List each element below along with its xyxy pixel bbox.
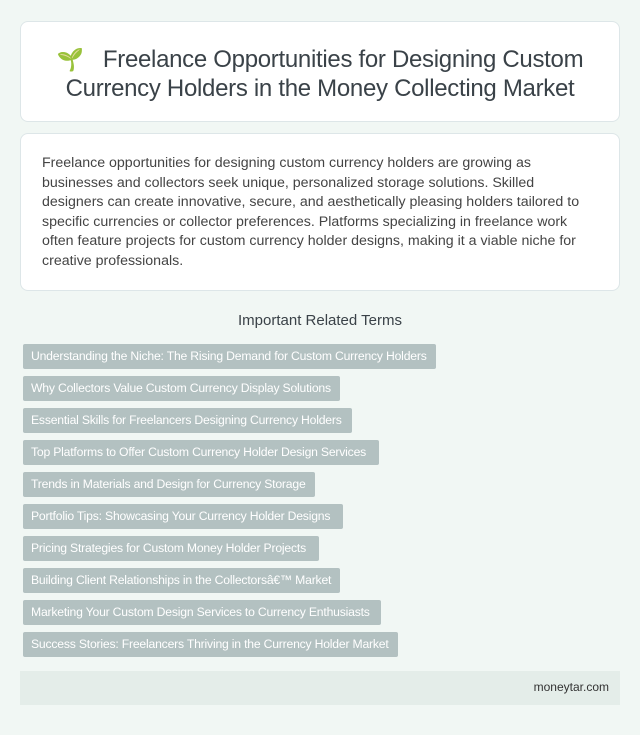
tag 6: Portfolio Tips: Showcasing Your Currency Holder Designs: [31, 509, 330, 523]
footer: [20, 671, 620, 705]
terms list: [23, 344, 436, 657]
tag 10: Success Stories: Freelancers Thriving in the Currency Holder Market: [31, 637, 389, 651]
tag 7: [23, 536, 319, 561]
tag 3: Essential Skills for Freelancers Designing Currency Holders: [31, 413, 342, 427]
tag 4: Top Platforms to Offer Custom Currency Holder Design Services: [31, 445, 366, 459]
description text: [42, 155, 579, 268]
description text: often feature projects for custom currency holder designs, making it a viable niche for: [42, 233, 576, 249]
tag 5: Trends in Materials and Design for Currency Storage: [31, 477, 306, 491]
tag 2: Why Collectors Value Custom Currency Display Solutions: [31, 381, 331, 395]
tag 5: [23, 472, 315, 497]
title card: [20, 21, 620, 122]
tag 9: [23, 600, 381, 625]
description text: businesses and collectors seek unique, personalized storage solutions. Skilled: [42, 174, 534, 190]
tag 7: Pricing Strategies for Custom Money Holder Projects: [31, 541, 306, 555]
description text: specific currencies or collector preferences. Platforms specializing in freelance work: [42, 214, 567, 230]
description card: [20, 133, 620, 291]
tag 3: [23, 408, 352, 433]
tag 1: [23, 344, 436, 369]
section heading: Important Related Terms: [238, 312, 402, 329]
description text: Freelance opportunities for designing custom currency holders are growing as: [42, 155, 531, 171]
tag 9: Marketing Your Custom Design Services to Currency Enthusiasts: [31, 605, 370, 619]
tag 6: [23, 504, 343, 529]
tag 1: Understanding the Niche: The Rising Demand for Custom Currency Holders: [31, 349, 427, 363]
description text: creative professionals.: [42, 252, 183, 268]
tag 2: [23, 376, 340, 401]
tag 8: [23, 568, 340, 593]
footer source: moneytar.com: [534, 680, 609, 694]
tag 4: [23, 440, 379, 465]
tag 8: Building Client Relationships in the Collectorsâ€™ Market: [31, 573, 331, 587]
description text: designers can create innovative, secure, and aesthetically pleasing holders tailored to: [42, 194, 579, 210]
tag 10: [23, 632, 398, 657]
title: 🌱 Freelance Opportunities for Designing Custom Currency Holders in the Money Collecting Market: [57, 46, 583, 102]
